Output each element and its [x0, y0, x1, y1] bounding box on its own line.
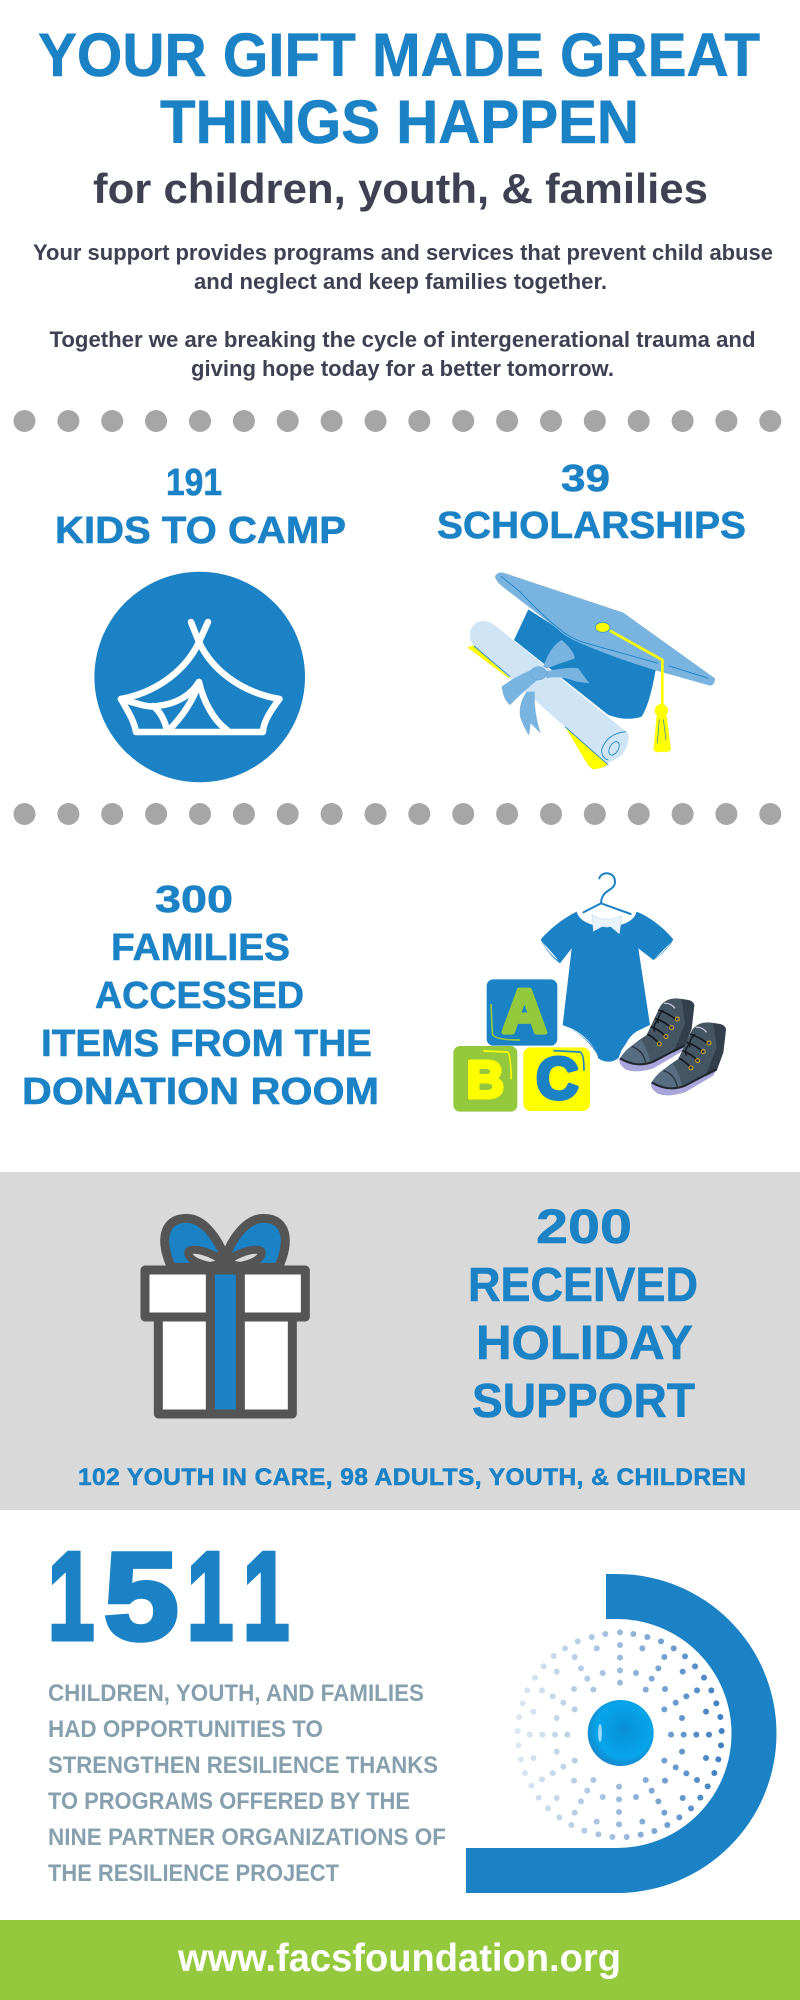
- stat: holiday support: HOLIDAY: [476, 1317, 693, 1370]
- big number 1511: 1: [48, 1528, 94, 1666]
- icon: graduation cap and diploma: [467, 572, 715, 769]
- dotted divider 2: [14, 803, 781, 825]
- holiday breakdown: 102 YOUTH IN CARE, 98 ADULTS, YOUTH, & CHILDREN: [78, 1464, 746, 1491]
- big number 1511: 5: [104, 1528, 178, 1666]
- icon: letter blocks: C: [536, 1047, 578, 1112]
- title: YOUR GIFT MADE GREAT: [38, 21, 760, 89]
- stat: scholarships: SCHOLARSHIPS: [437, 505, 746, 547]
- resilience paragraph: HAD OPPORTUNITIES TO: [48, 1716, 323, 1743]
- panel: holiday support: [0, 1172, 800, 1510]
- intro paragraph: and neglect and keep families together.: [194, 269, 607, 294]
- icon: onesie: [541, 912, 673, 1062]
- stat: kids to camp: KIDS TO CAMP: [55, 510, 346, 552]
- stat: kids to camp: [55, 462, 346, 552]
- stat: holiday support: RECEIVED: [468, 1259, 698, 1312]
- big number 1511: 1: [187, 1528, 233, 1666]
- stat: scholarships: [437, 458, 746, 547]
- stat: holiday support: SUPPORT: [472, 1375, 695, 1428]
- stat: donation room: ACCESSED: [95, 975, 304, 1017]
- icon: letter blocks: [453, 978, 590, 1112]
- dotted divider 1: [14, 410, 781, 432]
- icon: gift box: [145, 1218, 305, 1414]
- stat: holiday support: 200: [536, 1201, 632, 1254]
- stat: kids to camp: 191: [166, 462, 222, 504]
- intro paragraph: Together we are breaking the cycle of intergenerational trauma and: [50, 327, 756, 352]
- intro paragraph: giving hope today for a better tomorrow.: [191, 356, 614, 381]
- resilience paragraph: TO PROGRAMS OFFERED BY THE: [48, 1788, 410, 1815]
- icon: tent in circle: [94, 572, 305, 782]
- stat: donation room: 300: [155, 879, 233, 921]
- resilience paragraph: THE RESILIENCE PROJECT: [48, 1860, 339, 1887]
- intro paragraph: [33, 240, 773, 381]
- icon: hanger: [583, 873, 631, 914]
- title: THINGS HAPPEN: [160, 88, 639, 156]
- stat: scholarships: 39: [561, 458, 610, 500]
- stat: donation room: DONATION ROOM: [22, 1071, 379, 1113]
- resilience paragraph: [48, 1680, 446, 1887]
- big number 1511: 1: [243, 1528, 289, 1666]
- icon: letter blocks: B: [467, 1050, 504, 1108]
- resilience paragraph: STRENGTHEN RESILIENCE THANKS: [48, 1752, 438, 1779]
- title: [38, 21, 760, 156]
- resilience paragraph: CHILDREN, YOUTH, AND FAMILIES: [48, 1680, 424, 1707]
- stat: donation room: [22, 879, 379, 1113]
- stat: donation room: FAMILIES: [111, 927, 290, 969]
- resilience paragraph: NINE PARTNER ORGANIZATIONS OF: [48, 1824, 446, 1851]
- stat: donation room: ITEMS FROM THE: [41, 1023, 372, 1065]
- website url: www.facsfoundation.org: [177, 1937, 621, 1980]
- intro paragraph: Your support provides programs and services that prevent child abuse: [33, 240, 773, 265]
- icon: shoes: [619, 998, 726, 1095]
- icon: onesie, blocks and shoes: [453, 873, 726, 1112]
- subtitle: for children, youth, & families: [93, 165, 708, 212]
- footer band: [0, 1920, 800, 2000]
- stat: holiday support: [468, 1201, 698, 1428]
- icon: resilience project logo: [466, 1574, 776, 1893]
- icon: letter blocks: A: [502, 978, 547, 1047]
